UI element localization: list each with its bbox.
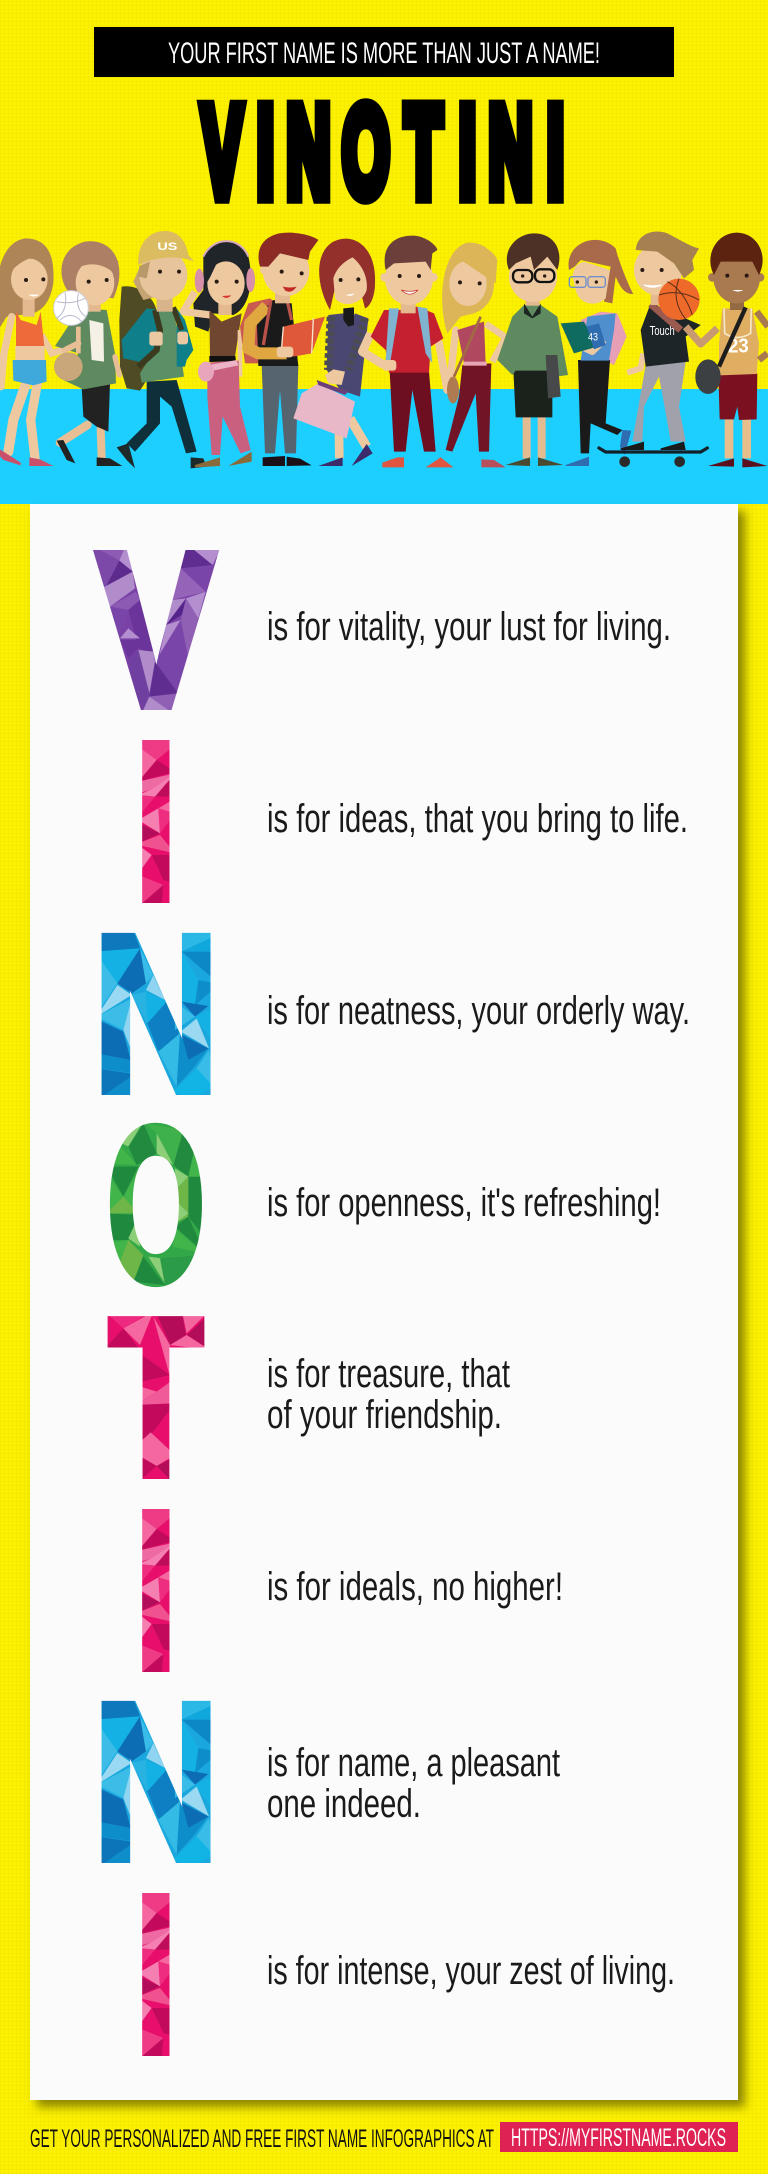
student: boy with backpack and cap: US [157,241,177,253]
line: name: is for name, a pleasant [267,1741,560,1785]
student: girl with ponytail and tablet: 43 [588,332,598,344]
student: boy in tank top: 23 [728,336,749,358]
student: boy with backpack and cap [117,231,207,468]
student: girl with headphones [183,241,255,467]
line: name: one indeed. [267,1782,421,1826]
letter N second: N [93,1656,219,1907]
student: boy with red hair reading book [240,233,325,466]
students 7 to 12 [362,231,768,467]
blue floor band [0,389,768,504]
student: boy in tank top [695,233,768,467]
student: boy in red shirt [362,236,453,467]
student: boy with glasses [497,233,568,466]
letter V: V [96,506,216,753]
student: girl with ponytail and tablet [561,240,633,466]
panel: white acrostic card [30,504,738,2100]
letter O: O [107,1082,205,1329]
student: blonde girl [442,243,506,467]
title: name: VINOTINI [202,82,564,224]
letter I third: I [130,1843,182,2107]
student: girl in orange top [0,238,78,466]
students 1 to 6 [0,231,375,468]
line: ideals: is for ideals, no higher! [267,1565,563,1609]
illustration: row of twelve students [0,231,768,468]
student: girl with bob and pink bag [293,239,375,466]
header bar [94,27,674,77]
student: skater with basketball: Touch [650,324,675,338]
line: treasure: of your friendship. [267,1393,502,1437]
letter I: I [130,690,182,954]
letter T: T [108,1270,204,1525]
line: treasure [267,1352,510,1437]
line: treasure: is for treasure, that [267,1352,510,1396]
student: skater with basketball [599,231,717,467]
letter N: N [93,888,219,1139]
line: name [267,1741,560,1826]
student: volleyball player [54,241,122,466]
letter I second: I [130,1459,182,1723]
